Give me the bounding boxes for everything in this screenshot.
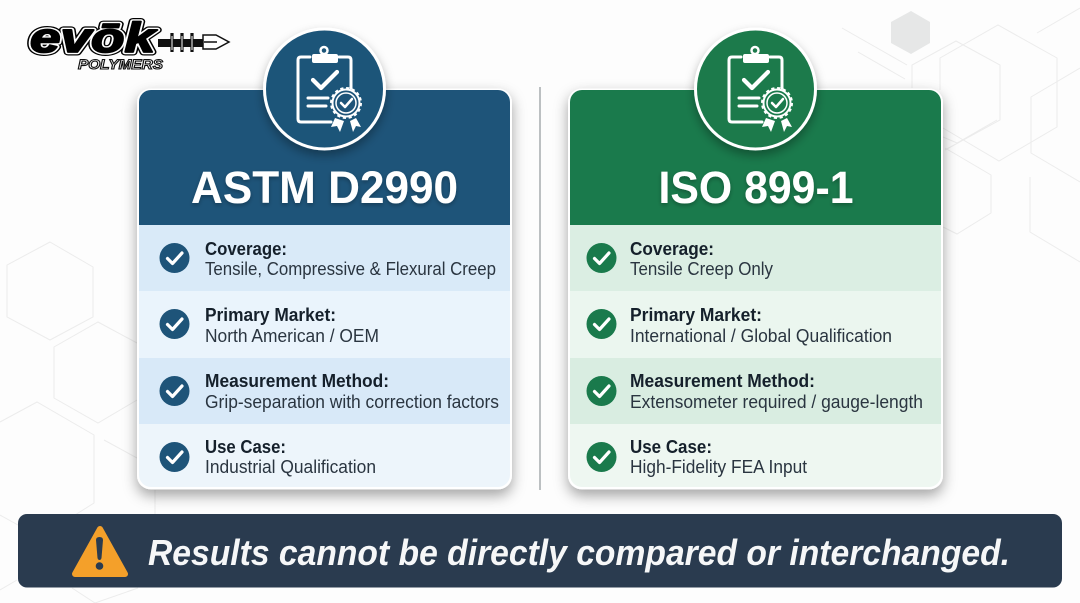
row: primary market: Primary Market:: [205, 305, 336, 325]
row: coverage: [586, 239, 773, 279]
row: use case: Use Case:: [630, 437, 712, 457]
row: primary market: North American / OEM: [205, 326, 379, 346]
logo: Evok Polymers: POLYMERS: [78, 56, 164, 72]
panel: ISO 899-1: [568, 88, 943, 490]
header band: ASTM: [139, 90, 510, 225]
row: measurement method: [160, 371, 499, 412]
row: coverage: Coverage:: [205, 239, 287, 259]
row: measurement method: [586, 371, 923, 412]
row: coverage: Coverage:: [630, 239, 714, 259]
row: primary market: Primary Market:: [630, 305, 762, 325]
row: measurement method: Grip-separation with correction factors: [205, 392, 499, 412]
icon: grey hexagon: [891, 11, 930, 54]
callout: warning banner: [18, 514, 1062, 588]
row: measurement method: Measurement Method:: [205, 371, 389, 391]
icon: bullet: [158, 33, 229, 52]
row: use case: [160, 437, 376, 477]
header band: ISO: [570, 90, 941, 225]
heading: ASTM D2990: ASTM D2990: [191, 162, 458, 213]
logo: Evok Polymers: [30, 14, 229, 72]
warning text: Results cannot be directly compared or interchanged.: [148, 532, 1010, 573]
row: primary market: International / Global Qualification: [630, 326, 892, 346]
row: use case: Industrial Qualification: [205, 457, 376, 477]
heading: ISO 899-1: ISO 899-1: [658, 162, 854, 213]
icon: ISO clipboard badge: [696, 29, 816, 149]
row: primary market: [586, 305, 892, 346]
panel: ASTM D2990: [137, 88, 512, 490]
logo: Evok Polymers: evōk: [30, 14, 158, 61]
row: use case: [586, 437, 807, 477]
row: primary market: [160, 305, 379, 346]
row: coverage: [160, 239, 496, 279]
icon: ASTM clipboard badge: [264, 29, 384, 149]
logo: Evok Polymers: evōk: [30, 14, 158, 61]
row: use case: Use Case:: [205, 437, 286, 457]
row: measurement method: Measurement Method:: [630, 371, 815, 391]
logo: Evok Polymers: evōk: [30, 14, 158, 61]
divider between standards: [539, 87, 541, 490]
icon: warning triangle: [75, 529, 125, 574]
row: coverage: Tensile, Compressive & Flexural Creep: [205, 259, 496, 279]
row: coverage: Tensile Creep Only: [630, 259, 773, 279]
row: measurement method: Extensometer required / gauge-length: [630, 392, 923, 412]
row: use case: High-Fidelity FEA Input: [630, 457, 807, 477]
